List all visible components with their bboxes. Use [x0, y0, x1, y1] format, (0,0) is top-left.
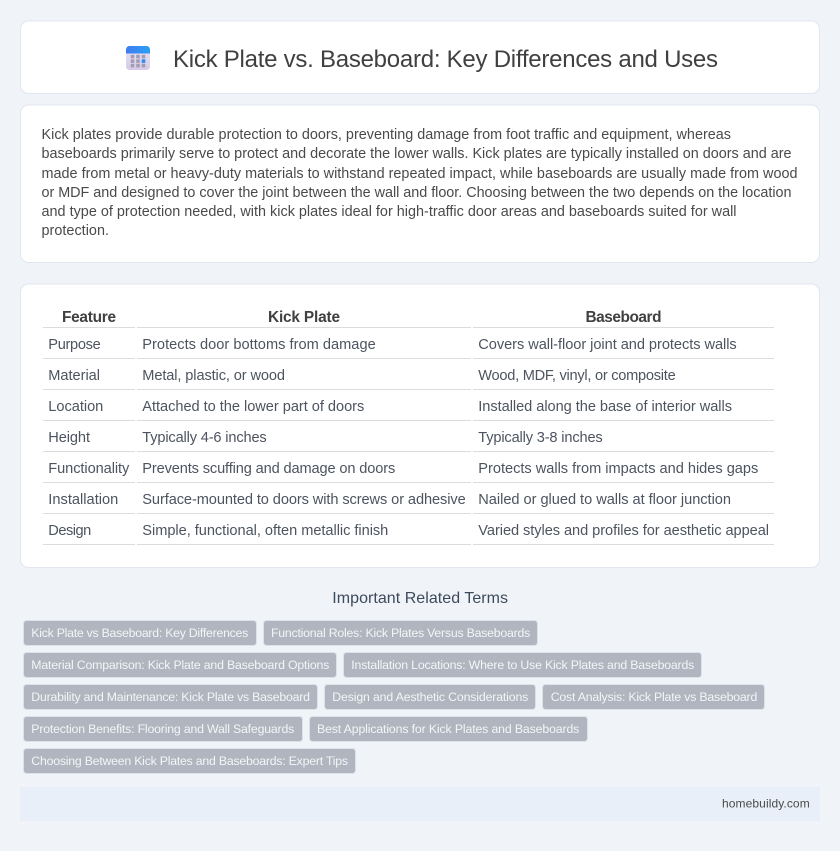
table row: installation [48, 492, 731, 508]
tag: Protection Benefits: Flooring and Wall Safeguards [31, 722, 294, 736]
panel: intro paragraph [20, 105, 820, 262]
table row: purpose: Covers wall-floor joint and protects walls [478, 337, 737, 353]
table row: design [48, 523, 769, 539]
table row: installation: Surface-mounted to doors with screws or adhesive [142, 492, 466, 508]
table header row: Feature [62, 309, 116, 326]
text block: summary: and type of protection needed, with kick plates ideal for high-traffic door areas and baseboards suited for wall [42, 204, 736, 220]
title: Kick Plate vs. Baseboard: Key Differences and Uses [173, 46, 718, 73]
table row: material: Material [48, 368, 100, 384]
footer source text: homebuildy.com [722, 796, 810, 810]
tag: Choosing Between Kick Plates and Baseboards: Expert Tips [31, 754, 348, 768]
table row: functionality [48, 461, 758, 477]
tag [24, 652, 336, 678]
table row: purpose: Protects door bottoms from damage [142, 337, 376, 353]
table header row: Baseboard [586, 309, 662, 326]
table row: material: Wood, MDF, vinyl, or composite [478, 368, 676, 384]
table row: installation: Installation [48, 492, 118, 508]
tag: Installation Locations: Where to Use Kick Plates and Baseboards [351, 658, 694, 672]
table row: functionality: Protects walls from impacts and hides gaps [478, 461, 758, 477]
table row: functionality: Functionality [48, 461, 130, 477]
table row: design: Varied styles and profiles for aesthetic appeal [478, 523, 769, 539]
table row: design: Simple, functional, often metallic finish [142, 523, 388, 539]
icon: calendar grid [126, 46, 150, 70]
tag [310, 716, 588, 742]
table header row: Kick Plate [268, 309, 340, 326]
tag [24, 620, 256, 646]
tag [324, 684, 536, 710]
table row: purpose [48, 337, 737, 353]
table row: material [48, 368, 676, 384]
tag [24, 748, 356, 774]
table row: installation: Nailed or glued to walls at floor junction [478, 492, 731, 508]
tag: Kick Plate vs Baseboard: Key Differences [31, 626, 248, 640]
text block: summary: baseboards primarily serve to protect and decorate the lower walls. Kick plates are typically installed on doors and are [42, 146, 792, 162]
panel: related term tags [24, 620, 764, 774]
table row: design: Design [48, 523, 91, 539]
tag: Design and Aesthetic Considerations [332, 690, 528, 704]
table row: height: Typically 3-8 inches [478, 430, 603, 446]
heading: important related terms: Important Related Terms [332, 590, 508, 607]
tag [264, 620, 538, 646]
table row: height: Height [48, 430, 90, 446]
tag: Best Applications for Kick Plates and Baseboards [317, 722, 579, 736]
tag [24, 716, 302, 742]
table row: functionality: Prevents scuffing and damage on doors [142, 461, 395, 477]
tag: Durability and Maintenance: Kick Plate vs Baseboard [31, 690, 310, 704]
tag: Cost Analysis: Kick Plate vs Baseboard [551, 690, 757, 704]
text block: summary: made from metal or heavy-duty materials to withstand repeated impact, while baseboards are usually made from wood [42, 166, 798, 182]
text block: summary: or MDF and designed to cover the joint between the wall and floor. Choosing between the two depends on the location [42, 185, 792, 201]
table row: location: Attached to the lower part of doors [142, 399, 364, 415]
text block: summary: Kick plates provide durable protection to doors, preventing damage from foot traffic and equipment, whereas [42, 127, 731, 143]
table row: material: Metal, plastic, or wood [142, 368, 285, 384]
panel: comparison table [20, 284, 820, 568]
text block: summary [42, 127, 798, 239]
tag [344, 652, 702, 678]
table header row [62, 309, 662, 326]
table row: purpose: Purpose [48, 337, 101, 353]
table row: height [48, 430, 603, 446]
text block: summary: protection. [42, 223, 109, 239]
tag [542, 684, 764, 710]
tag: Material Comparison: Kick Plate and Baseboard Options [31, 658, 329, 672]
table row: location [48, 399, 732, 415]
footer [20, 787, 820, 821]
header panel [20, 21, 820, 94]
tag: Functional Roles: Kick Plates Versus Baseboards [271, 626, 530, 640]
tag [24, 684, 318, 710]
table row: location: Installed along the base of interior walls [478, 399, 732, 415]
table row: location: Location [48, 399, 103, 415]
table row: height: Typically 4-6 inches [142, 430, 267, 446]
